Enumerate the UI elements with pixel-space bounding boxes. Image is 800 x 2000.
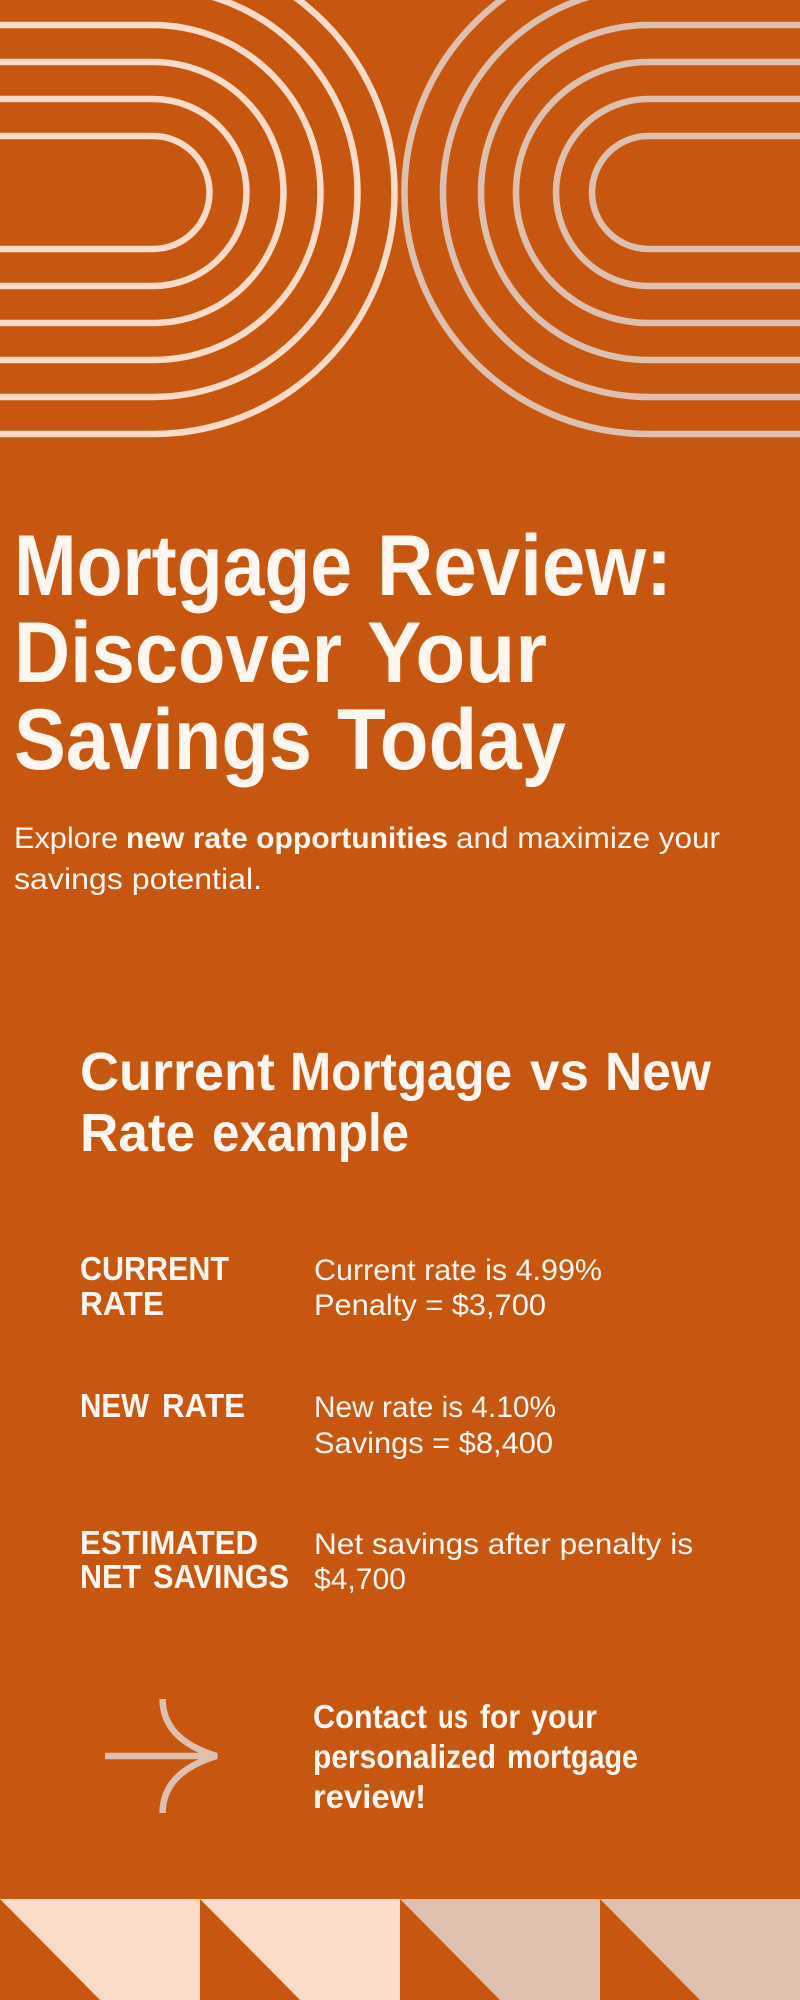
row: current rate [80, 1250, 602, 1322]
subtitle: savings potential. [14, 863, 262, 896]
row: estimated net savings [80, 1524, 693, 1596]
label: new rate: NEW [80, 1387, 150, 1424]
label: new rate: RATE [162, 1387, 245, 1424]
call to action: review! [313, 1778, 426, 1815]
decorative concentric arches: right [404, 0, 800, 434]
values: new rate: New rate is 4.10% [314, 1391, 556, 1424]
values: current rate: Penalty = $3,700 [314, 1289, 546, 1322]
subtitle: Explore [14, 822, 118, 855]
label: estimated net savings: SAVINGS [153, 1558, 289, 1595]
subtitle [14, 822, 720, 896]
values: estimated net savings: $4,700 [314, 1563, 406, 1596]
values: new rate: Savings = $8,400 [314, 1427, 553, 1460]
section heading: New [605, 1042, 712, 1102]
label: estimated net savings [80, 1524, 289, 1595]
title [14, 518, 672, 788]
title: Your [367, 605, 547, 701]
icon: arrow [105, 1699, 216, 1813]
section heading: Rate [80, 1103, 195, 1163]
label: current rate: RATE [80, 1285, 164, 1322]
title: Today [337, 692, 566, 788]
call to action: personalized [313, 1738, 496, 1775]
values: estimated net savings: Net savings after penalty is [314, 1528, 693, 1561]
footer triangle band [0, 1899, 800, 2000]
call to action: Contact [313, 1698, 427, 1735]
call to action: us [438, 1698, 468, 1735]
title: Review: [377, 518, 672, 614]
section heading: vs [530, 1042, 589, 1102]
section heading: Current [80, 1042, 275, 1102]
label: new rate [80, 1387, 245, 1424]
values: current rate [314, 1254, 602, 1322]
section heading: Mortgage [290, 1042, 512, 1102]
title: Discover [14, 605, 342, 701]
subtitle: new rate opportunities [126, 822, 448, 855]
call to action: your [531, 1698, 597, 1735]
values: estimated net savings [314, 1528, 693, 1596]
section heading: example [212, 1103, 409, 1163]
label: estimated net savings: NET [80, 1558, 141, 1595]
values: current rate: Current rate is 4.99% [314, 1254, 602, 1287]
values: new rate [314, 1391, 556, 1460]
label: estimated net savings: ESTIMATED [80, 1524, 258, 1561]
call to action: for [480, 1698, 520, 1735]
subtitle: and maximize your [456, 822, 720, 855]
title: Mortgage [14, 518, 352, 614]
title: Savings [14, 692, 312, 788]
label: current rate [80, 1250, 229, 1322]
call to action: mortgage [507, 1738, 638, 1775]
call to action [313, 1698, 638, 1815]
label: current rate: CURRENT [80, 1250, 229, 1287]
decorative concentric arches: left [0, 0, 394, 434]
section heading [80, 1042, 712, 1163]
row: new rate [80, 1387, 556, 1460]
